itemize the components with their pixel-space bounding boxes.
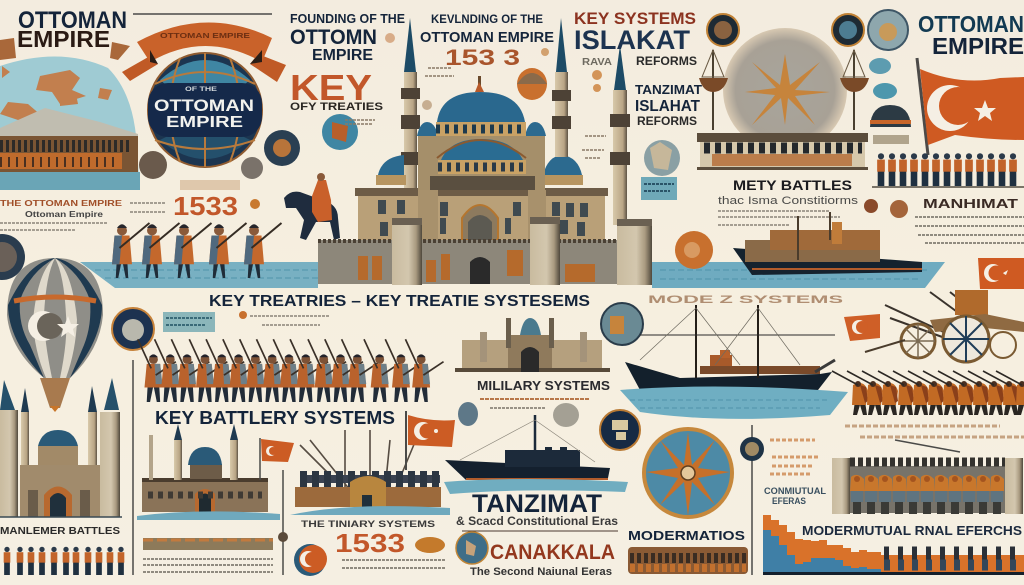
heading: Tanzimat: & Scacd Constitutional Eras [456,514,618,528]
icon: orange dome seal [517,68,547,100]
label: teal plaque [641,177,677,200]
text block: constitutional eras: EFERAS [772,496,806,506]
central arch portal [462,205,498,240]
caption: battles lower left: MANLEMER BATTLES [0,525,120,537]
globe emblem: OTTOMAN [154,96,254,115]
title: top left: OTTOMAN [18,7,127,34]
ship: large sailing ship [620,305,848,419]
towers [392,222,422,285]
heading: founding (second): OTTOMAN EMPIRE [420,29,554,46]
vertical pole [278,470,288,575]
compass with colonnade [697,28,869,170]
globe emblem: EMPIRE [166,114,243,131]
heading: founding of the Ottoman Empire: FOUNDING OF THE [290,11,405,26]
main dome [437,92,525,122]
heading: founding of the Ottoman Empire: OTTOMN [290,26,377,49]
ribbon banner: OTTOMAN EMPIRE [160,33,250,40]
vertical pole with medallion [740,425,764,575]
heading: founding of the Ottoman Empire: EMPIRE [312,47,373,64]
horse and rider [284,173,340,240]
globe emblem: OF THE [185,87,217,93]
heading: key systems and Islahat reforms: REFORMS [636,54,697,68]
scattered sketches: around mosque [345,33,606,158]
heading: key systems and Islahat reforms: ISLAKAT [574,25,690,55]
panel: empire map with army [0,56,140,190]
text block: constitutional eras: CONMIUTUAL [764,486,827,496]
medallions: top right [707,10,908,50]
flag: mid bottom small [260,438,294,480]
ship: steamship on right [733,212,922,275]
ship: dark steam ship [444,415,628,494]
mosque: bottom left [0,378,122,517]
fortress with troops [832,458,1023,514]
caption: modern header faded: MODE Z SYSTEMS [648,294,843,306]
body wings [358,190,605,245]
text block: Manhimat: MANHIMAT [923,196,1018,211]
heading: founding (second): 153 3 [445,45,520,70]
heading: military systems: MILILARY SYSTEMS [477,378,610,393]
medallion: bottom-left edge circle [0,234,25,280]
medallions: mid right [458,303,643,450]
caption: the thintary systems and 1533: 1533 [335,528,405,558]
flag: small orange [844,314,880,341]
central block [418,135,545,190]
heading: Tanzimat: TANZIMAT [472,490,602,518]
water band: center right [652,262,945,288]
globe emblem [148,53,262,167]
vertical divider line [132,360,134,575]
text block: Ottoman Empire notes: THE OTTOMAN EMPIRE [0,199,123,208]
caption: 1533 left [173,180,260,221]
heading: founding of the Ottoman Empire [290,11,405,64]
heading: modernmatios with crowd [628,528,748,574]
heading: key systems and Islahat reforms: RAVA [582,57,612,68]
water band: center left [80,262,318,288]
riflemen row [112,223,282,278]
teal note plaque [163,311,247,332]
caption: the thintary systems and 1533 [301,519,445,568]
heading: founding (second) [420,12,554,70]
caption: 1533 left: 1533 [173,191,238,221]
heading: key battlery systems: KEY BATTLERY SYSTEMS [155,408,395,428]
minaret: far left [401,18,420,222]
heading: key systems and Islahat reforms: REFORMS [637,114,697,128]
minaret: mid right [552,18,571,157]
flag: upper right small [978,258,1024,289]
heading: modernmatios with crowd: MODERMATIOS [628,528,745,543]
lower domes [378,155,404,175]
heading: key systems and Islahat reforms: TANZIMAT [635,82,702,97]
ornament: top divider [133,13,272,15]
figures [358,250,595,282]
bar chart [763,515,1024,575]
second dome [441,139,523,160]
soldiers: lower left row [4,547,124,575]
side columns and windows [418,190,438,240]
heading: key treaties band: KEY TREATRIES – KEY TREATIE SYSTESEMS [209,293,590,310]
heading: Canakkala with medallion: CANAKKALA [490,541,615,564]
caption: the thintary systems and 1533: THE TINIARY SYSTEMS [301,519,435,529]
soldiers: spear row [138,339,444,402]
heading: KEY treaties: OFY TREATIES [290,101,383,113]
small icons: right column [869,58,911,144]
banded strip: lower left notes [143,538,273,572]
heading: key systems and Islahat reforms: KEY SYSTEMS [574,9,696,28]
heading: modermutual rnal efercs: MODERMUTUAL RNAL EFERCHS [802,523,1022,538]
mosque: central [318,18,652,285]
minaret: far right [610,45,630,225]
ribbon banner [122,22,286,82]
heading: key battles: METY BATTLES [733,177,852,193]
heading: key battles: thac Isma Constitiorms [718,195,859,207]
fortress scene with flag [290,430,450,515]
soldiers: orange spear row [832,371,1024,415]
mosque: small above military systems [455,318,610,372]
heading: Canakkala with medallion [456,532,615,578]
balloon [7,258,103,412]
heading: military systems [477,378,610,408]
heading: key treaties band [209,293,590,325]
gate [470,257,490,284]
heading: key battles [718,177,859,225]
text block: Manhimat [864,196,1024,243]
cart and cannon [865,290,1024,362]
title: top right [918,11,1024,59]
title: top left: EMPIRE [17,26,110,52]
wall [318,240,620,284]
title: top right: EMPIRE [932,33,1024,59]
heading: key systems and Islahat reforms [574,9,702,128]
heading: key systems and Islahat reforms: ISLAHAT [635,98,700,115]
heading: Tanzimat [456,490,618,531]
flag: large mid [406,411,455,470]
heading: Canakkala with medallion: The Second Naiunal Eeras [470,566,612,578]
medallion: orange [675,231,713,269]
text block: constitutional eras [764,440,827,506]
medallions: left cluster [139,114,358,179]
flag: large Turkish flag [917,58,1024,155]
text block: Ottoman Empire notes [0,199,165,230]
mosque: mid bottom [137,424,280,520]
compass rose [642,427,734,519]
soldiers: under large flag [872,153,1024,188]
flag emblem: round [294,544,327,576]
title: top left [0,7,130,60]
medallion: navy with gold ring [112,308,154,350]
heading: KEY treaties: KEY [290,67,372,108]
note lines: above fortress [845,426,1024,452]
heading: founding (second): KEVLNDING OF THE [431,12,543,26]
text block: Ottoman Empire notes: Ottoman Empire [25,210,104,219]
icon: round map seal [644,140,680,176]
